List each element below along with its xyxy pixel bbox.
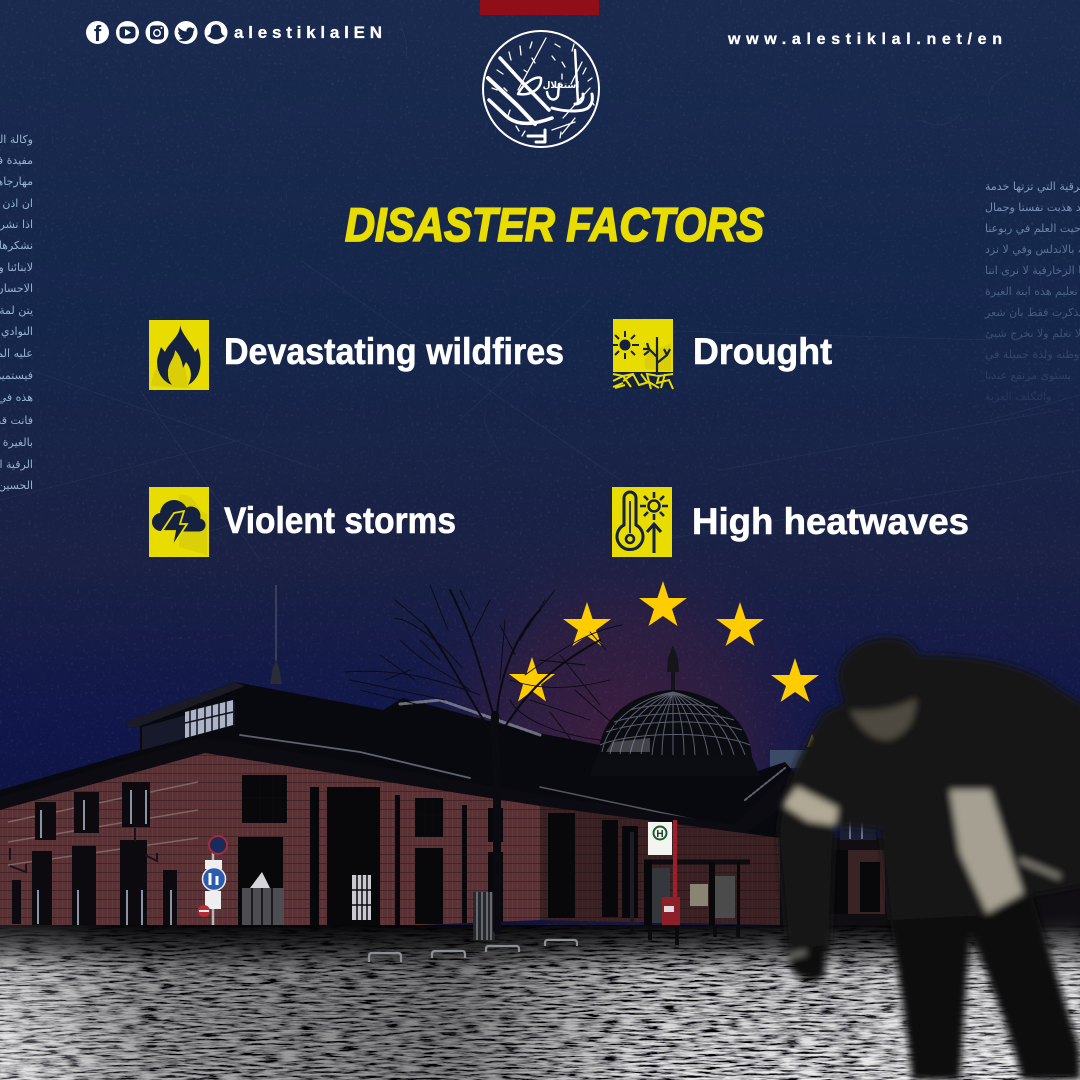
factor: devastating wildfires [149,320,564,390]
logo: circular calligraphy emblem [483,31,599,147]
dark backdrop behind the man [780,838,1080,928]
bare tree [345,585,622,930]
pillars standing in water [632,925,738,945]
bus stop sign [648,820,680,944]
front wall openings [238,775,638,932]
left wall [0,753,205,934]
arm reflective band [783,787,838,825]
street lamp [630,832,634,932]
right arabic text column [984,180,1080,403]
beanie [838,637,923,711]
bright water halo round legs [870,930,1080,1080]
logo: circular calligraphy emblem: استقلال [543,81,579,91]
left wall windows [12,782,177,934]
railings in water [369,940,577,962]
factor: drought [613,319,832,389]
wall lamps [10,828,157,872]
factor: high heatwaves: High heatwaves [692,501,969,542]
roof mass [0,682,810,850]
social media icons and handle: alestiklalEN [234,23,382,42]
dome [590,645,760,776]
front wall [205,753,780,934]
title: DISASTER FACTORS [345,198,764,251]
icon: storm cloud with lightning [149,487,209,557]
right arabic text column: يستوي مرتفع عندنا [985,369,1071,382]
right far building pavilion [817,850,885,914]
jacket [778,655,1080,950]
flooded market hall building [0,585,1080,955]
factor: drought: Drought [693,331,832,372]
website url: www.alestiklal.net/en [727,31,1002,48]
right arabic text column: وطنه ولذة جميلة في [985,348,1079,361]
social media icons and handle [86,21,382,46]
tree guard [473,892,495,940]
chest reflective panel [950,790,1023,913]
legs [888,905,972,1080]
bus shelter [644,860,750,940]
finial spire [275,585,277,665]
flood water [0,892,1080,1080]
icon: flame [149,320,209,390]
factor: devastating wildfires: Devastating wildfires [224,331,564,372]
sleeve highlight [1020,860,1060,877]
right arabic text column: والتكلف الغربة [985,390,1051,403]
left arabic text column: بالغيرة [3,436,33,449]
left arabic text column: ان اذن [2,197,33,210]
roof highlights [240,700,785,825]
icon: sun, dead tree and cracked earth [613,319,673,389]
left arabic text column: الرقية ا [0,458,33,471]
left arabic text column [0,133,33,492]
top red tab [480,0,599,15]
bus stop sign: H [656,829,664,840]
factor: high heatwaves [612,487,969,557]
left arabic text column: يتن لمة [0,304,33,317]
icon: thermometer, sun and up arrow [612,487,672,557]
eu stars arc [509,581,819,747]
right arabic text column: لا نعلم ولا نخرج شيئ [985,327,1080,340]
left arabic text column: النوادي [1,325,33,338]
social media icons and handle: f [94,21,102,46]
far glimpsed roof [770,750,812,768]
factor: violent storms: Violent storms [224,500,456,541]
face [850,698,916,740]
man walking in foreground [778,637,1080,1080]
glove [785,945,826,982]
lantern windows [142,702,235,750]
factor: violent storms [149,487,456,557]
street signs [198,836,227,955]
